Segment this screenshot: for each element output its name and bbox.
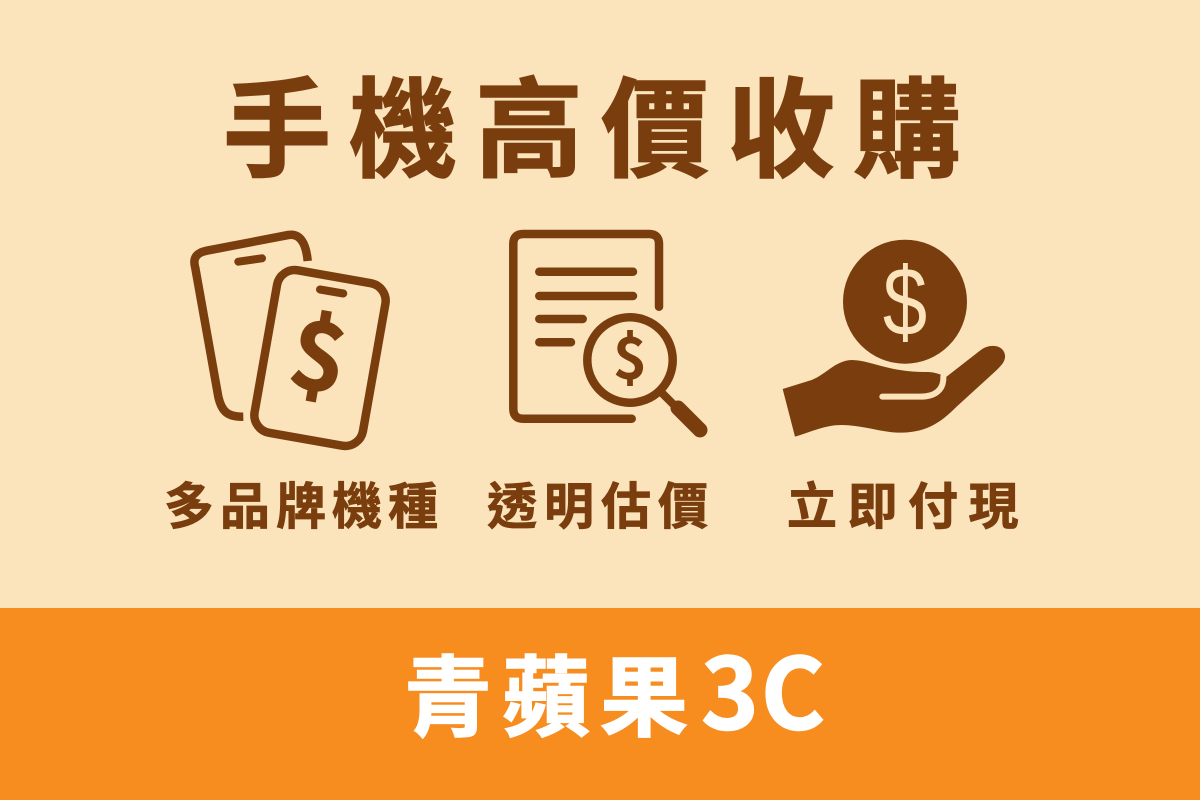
icon: two phones with dollar sign: $ [281,278,359,422]
icon: document with magnifier and dollar sign [509,230,708,438]
icon: hand holding coin: $ [883,248,927,356]
brand name: 青蘋果3C [404,616,827,758]
label: many brands: 多品牌機種 [164,467,444,539]
label: transparent valuation: 透明估價 [487,467,715,539]
icon: two phones with dollar sign [190,230,390,450]
footer band [0,608,1200,800]
label: instant cash: 立即付現 [787,467,1029,539]
title: 手機高價收購 [223,44,979,200]
icon: hand holding coin [782,240,1006,437]
icon: document with magnifier and dollar sign: $ [613,312,647,396]
